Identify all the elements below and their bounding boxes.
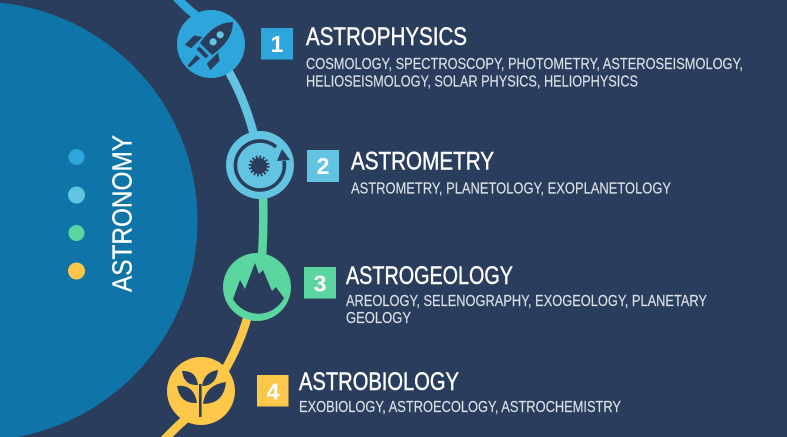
description astrophysics (306, 56, 743, 90)
description astrophysics: HELIOSEISMOLOGY, SOLAR PHYSICS, HELIOPHYSICS (306, 74, 638, 90)
description astrometry: ASTROMETRY, PLANETOLOGY, EXOPLANETOLOGY (351, 180, 671, 198)
heading astrobiology: ASTROBIOLOGY (299, 368, 459, 396)
item 4: astrobiology (257, 368, 621, 416)
description astrogeology: AREOLOGY, SELENOGRAPHY, EXOGEOLOGY, PLANETARY (346, 293, 707, 310)
icon: mountain (223, 253, 291, 321)
heading astrophysics: ASTROPHYSICS (306, 23, 467, 51)
item 2: astrometry (307, 148, 671, 198)
icon: astrometry orbit and gear (226, 131, 294, 199)
icon: rocket (176, 9, 246, 79)
description astrogeology: GEOLOGY (346, 310, 411, 327)
item 1: astrophysics (261, 23, 743, 90)
number badge 2 (307, 150, 339, 182)
number badge 4: 4 (267, 378, 280, 404)
number badge 3: 3 (314, 270, 326, 296)
connector lines (163, 0, 263, 437)
item 3: astrogeology (304, 262, 707, 327)
heading astrometry: ASTROMETRY (351, 148, 494, 176)
number badge 3 (304, 267, 336, 298)
panel: astronomy semicircle (0, 2, 198, 437)
description astrobiology: EXOBIOLOGY, ASTROECOLOGY, ASTROCHEMISTRY (299, 399, 621, 416)
heading astrogeology: ASTROGEOLOGY (346, 262, 513, 290)
description astrogeology (346, 293, 707, 327)
heading: astronomy: ASTRONOMY (106, 135, 138, 292)
legend dots (68, 149, 85, 280)
number badge 2: 2 (317, 153, 329, 179)
number badge 1 (261, 28, 293, 60)
number badge 1: 1 (271, 31, 284, 57)
number badge 4 (257, 375, 288, 406)
icon: plant (167, 357, 235, 425)
